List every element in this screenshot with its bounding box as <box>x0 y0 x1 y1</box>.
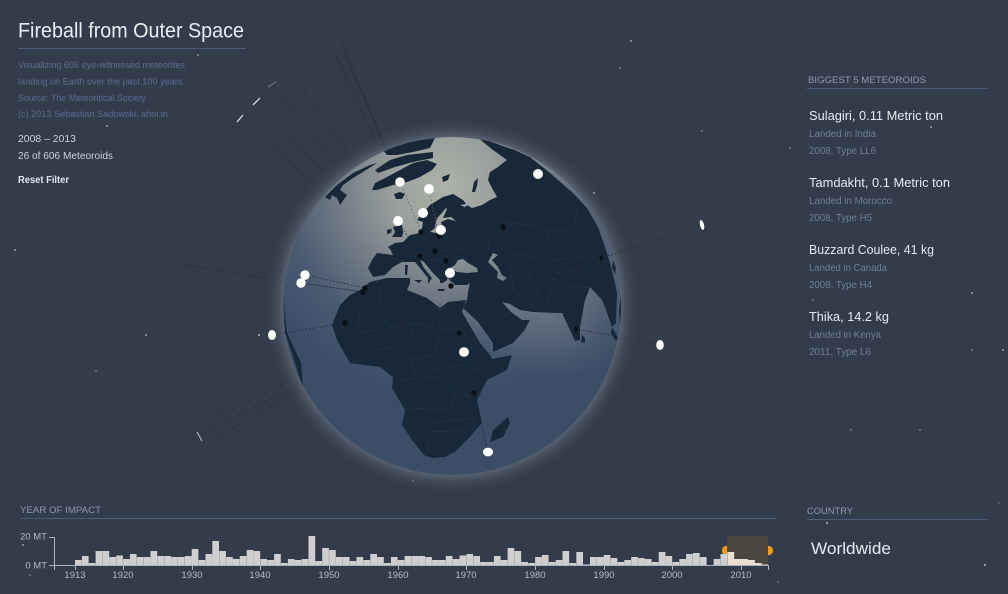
brush selection <box>727 536 768 566</box>
ocean <box>283 137 645 475</box>
title: Fireball from Outer Space <box>18 20 244 42</box>
x axis: 2010 <box>730 570 752 581</box>
panel: biggest meteoroids <box>807 75 987 358</box>
bars <box>75 536 727 566</box>
x axis: 1960 <box>387 570 409 581</box>
panel: country <box>807 506 987 558</box>
reset filter: Reset Filter <box>18 175 69 186</box>
x axis: 1970 <box>455 570 477 581</box>
panel heading: BIGGEST 5 METEOROIDS <box>808 75 926 85</box>
description <box>18 60 185 120</box>
meteoroid: Tamdakht: 2008, Type H5 <box>809 213 872 224</box>
meteoroid: Thika: 2011, Type L6 <box>809 347 871 358</box>
meteoroid: Sulagiri: Landed in India <box>809 129 876 140</box>
x axis: 1980 <box>524 570 546 581</box>
inland seas <box>430 203 507 281</box>
meteoroid: Buzzard Coulee: Buzzard Coulee, 41 kg <box>809 242 934 257</box>
x axis: 2000 <box>661 570 683 581</box>
meteoroid: Tamdakht: Tamdakht, 0.1 Metric ton <box>809 175 950 190</box>
meteoroid: Tamdakht: Landed in Morocco <box>809 196 892 207</box>
x axis: 1940 <box>249 570 271 581</box>
y axis: 20 MT <box>20 532 47 542</box>
timeline heading: YEAR OF IMPACT <box>20 505 102 515</box>
meteoroid: Sulagiri: Sulagiri, 0.11 Metric ton <box>809 108 943 123</box>
meteoroid: Thika <box>809 309 889 358</box>
country heading: COUNTRY <box>807 506 853 516</box>
country value: Worldwide <box>811 539 891 558</box>
Eurasia <box>368 137 617 352</box>
description: landing on Earth over the past 100 years. <box>18 76 185 88</box>
meteoroid: Sulagiri: 2008, Type LL6 <box>809 146 876 157</box>
filter status <box>18 133 113 162</box>
x axis: 1950 <box>318 570 340 581</box>
Asia rim islands <box>611 327 618 341</box>
meteoroid: Buzzard Coulee: Landed in Canada <box>809 263 887 274</box>
meteoroid: Thika: Thika, 14.2 kg <box>809 309 889 324</box>
meteoroid: Buzzard Coulee: 2008, Type H4 <box>809 280 872 291</box>
panel: year of impact <box>20 505 776 581</box>
x axis: 1930 <box>181 570 203 581</box>
globe <box>283 137 645 475</box>
x axis: 1990 <box>593 570 615 581</box>
Mediterranean islands <box>405 265 408 275</box>
filter status: 26 of 606 Meteoroids <box>18 150 113 162</box>
x axis: 1913 <box>64 570 86 581</box>
Greenland <box>372 160 437 190</box>
Iceland <box>394 192 405 199</box>
brush handles <box>722 546 773 555</box>
timeline bar chart <box>20 532 773 581</box>
Sri Lanka <box>581 335 585 343</box>
Arctic Canada <box>325 163 377 205</box>
Ireland <box>387 229 392 234</box>
y axis <box>20 532 54 572</box>
globe halo <box>262 116 642 496</box>
meteoroids <box>268 169 705 456</box>
land masses <box>283 137 622 458</box>
filter status: 2008 – 2013 <box>18 133 76 145</box>
y axis: 0 MT <box>25 560 47 572</box>
description: Visualizing 606 eye-witnessed meteorites <box>18 60 185 71</box>
UK <box>392 225 403 237</box>
description: (c) 2013 Sebastian Sadowski, ahoi.in <box>18 109 168 120</box>
meteor trails on globe <box>284 174 620 452</box>
selected bars <box>727 552 768 566</box>
Svalbard <box>442 174 450 182</box>
x axis <box>49 566 768 581</box>
meteor trails behind globe <box>184 43 702 441</box>
South America <box>283 293 303 387</box>
Novaya Zemlya <box>472 178 478 192</box>
meteoroid: Thika: Landed in Kenya <box>809 330 881 341</box>
meteoroid: Sulagiri <box>809 108 943 157</box>
meteor streaks <box>197 82 276 441</box>
impact points <box>342 224 602 396</box>
Madagascar <box>490 417 510 442</box>
meteoroid: Buzzard Coulee <box>809 242 934 291</box>
description: Source: The Meteoritical Society <box>18 93 146 104</box>
Africa <box>332 278 512 458</box>
meteoroid: Tamdakht <box>809 175 950 224</box>
country borders <box>350 187 607 457</box>
x axis: 1920 <box>112 570 134 581</box>
